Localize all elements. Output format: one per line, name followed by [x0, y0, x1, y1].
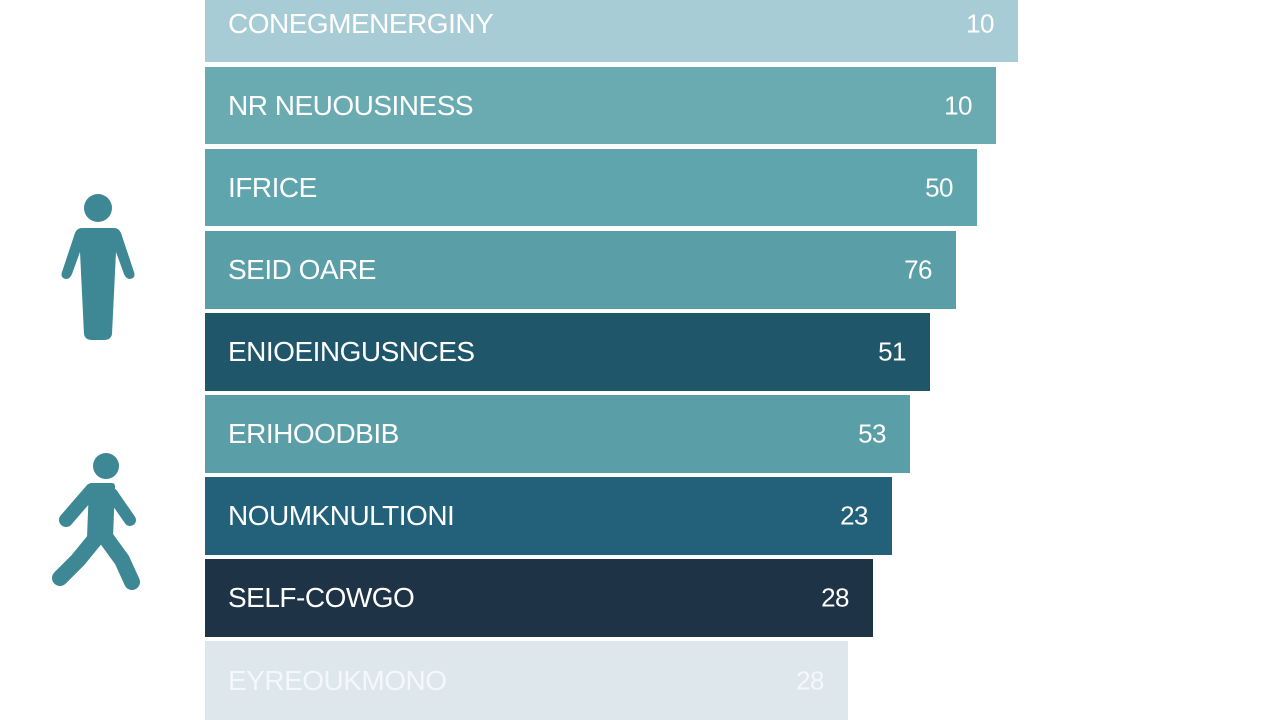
bar: EYREOUKMONO: 28 — [796, 665, 824, 695]
bar: NR NEUOUSINESS — [205, 67, 996, 144]
bar: NOUMKNULTIONI — [205, 477, 892, 555]
bar: SELF-COWGO — [205, 559, 873, 637]
bar: ENIOEINGUSNCES — [205, 313, 930, 391]
bar: ENIOEINGUSNCES: ENIOEINGUSNCES — [228, 336, 475, 367]
bar: SELF-COWGO: 28 — [821, 582, 849, 612]
bar: NOUMKNULTIONI: NOUMKNULTIONI — [228, 500, 454, 531]
bar: SEID OARE: 76 — [904, 254, 932, 284]
bar: CONEGMENERGINY: CONEGMENERGINY — [228, 8, 493, 39]
bar: IFRICE: IFRICE — [228, 172, 317, 202]
bar: ENIOEINGUSNCES: 51 — [878, 336, 906, 366]
bar: EYREOUKMONO: EYREOUKMONO — [228, 664, 447, 696]
bar: IFRICE: 50 — [925, 172, 953, 202]
bar: IFRICE — [205, 149, 977, 226]
bar: ERIHOODBIB — [205, 395, 910, 473]
bar: SEID OARE: SEID OARE — [228, 254, 376, 285]
bar: NR NEUOUSINESS: NR NEUOUSINESS — [228, 90, 473, 120]
bar: NOUMKNULTIONI: 23 — [840, 500, 868, 530]
icon: walking person — [52, 453, 140, 590]
bar: CONEGMENERGINY: 10 — [966, 8, 994, 38]
icon: standing person — [62, 194, 134, 340]
bar: ERIHOODBIB: 53 — [858, 418, 886, 448]
bar: NR NEUOUSINESS: 10 — [944, 90, 972, 120]
bar: SELF-COWGO: SELF-COWGO — [228, 582, 414, 613]
bar: ERIHOODBIB: ERIHOODBIB — [228, 418, 399, 449]
bar: CONEGMENERGINY — [205, 0, 1018, 62]
bar: SEID OARE — [205, 231, 956, 309]
bar: EYREOUKMONO — [205, 641, 848, 720]
